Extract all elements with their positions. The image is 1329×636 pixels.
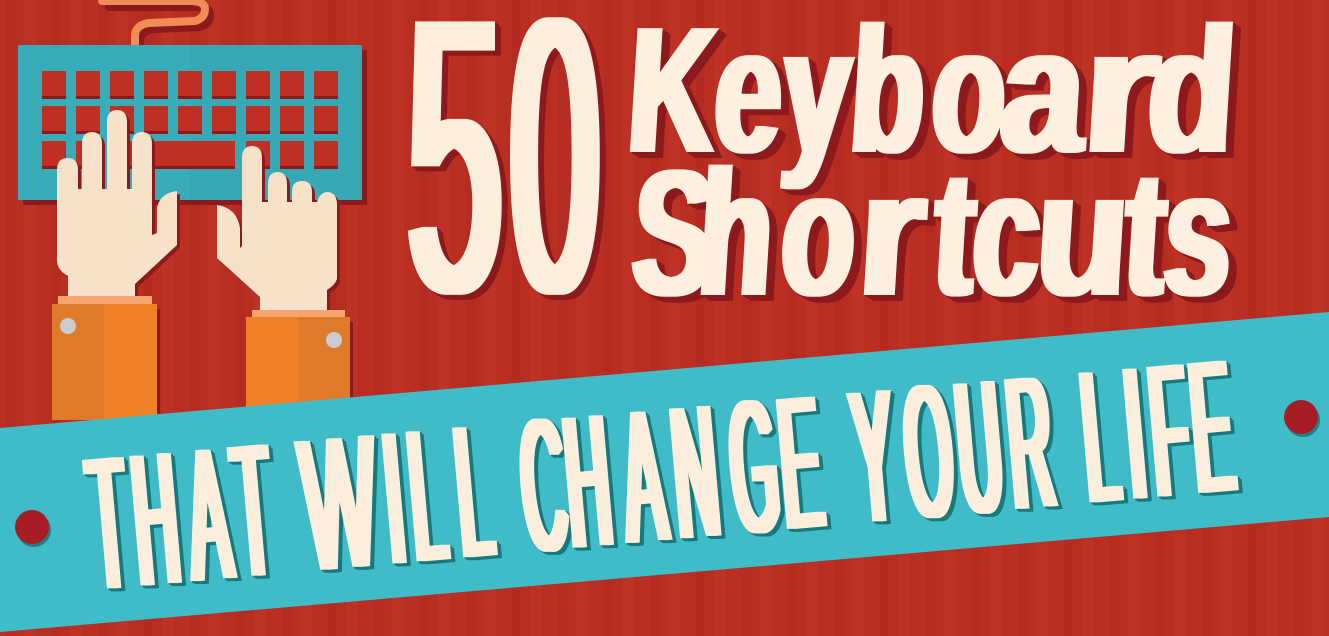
title: Shortcuts: s <box>1159 134 1238 334</box>
keyboard body <box>18 45 367 205</box>
banner text: THAT <box>81 403 280 630</box>
left sleeve <box>52 296 160 420</box>
banner text <box>81 319 1240 630</box>
title: Shortcuts: c <box>968 134 1046 334</box>
right dot <box>1284 400 1320 437</box>
title: Shortcuts: u <box>1031 134 1135 334</box>
title: Shortcuts: Sho <box>628 134 861 334</box>
title: Shortcuts: t <box>929 134 981 334</box>
banner text: W <box>294 394 385 611</box>
banner text: ILL CHANGE YOUR LIFE <box>377 319 1240 604</box>
title: Shortcuts <box>628 134 1238 334</box>
title: Shortcuts: t <box>1120 134 1171 334</box>
right hand <box>217 146 337 312</box>
title number: 50 <box>408 0 599 374</box>
left hand <box>57 110 177 298</box>
left dot <box>15 510 51 547</box>
title: Keyboard <box>624 0 1241 191</box>
banner ribbon <box>0 312 1329 632</box>
keyboard cable <box>102 1 210 50</box>
banner <box>0 312 1329 632</box>
icon: keyboard with hands <box>18 1 367 420</box>
title: Shortcuts: r <box>854 134 931 334</box>
right sleeve <box>246 310 353 407</box>
